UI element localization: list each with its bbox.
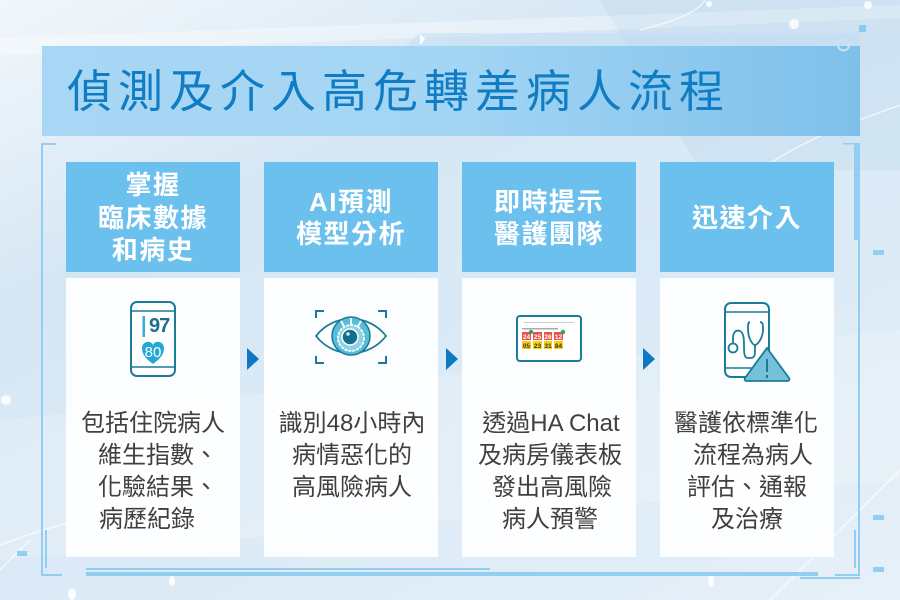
icon: dashboard	[516, 315, 582, 362]
icon: dashboard: 84	[555, 343, 562, 350]
panel: step 1 body	[66, 278, 240, 557]
step 2 description	[279, 410, 425, 501]
step 1 header: 掌握	[125, 170, 180, 200]
step 4 description: 評估、通報	[687, 474, 807, 501]
step 1 description: 維生指數、	[98, 442, 218, 469]
icon: dashboard: 24	[523, 334, 530, 341]
icon: vital signs monitor	[130, 301, 176, 377]
step 1 description: 包括住院病人	[81, 410, 225, 437]
panel: step 3 body	[462, 278, 636, 557]
step 1 header: 和病史	[112, 235, 194, 265]
step 3 description: 透過HA Chat	[482, 410, 620, 437]
step 1 description	[81, 410, 225, 533]
icon: refresh	[837, 46, 850, 52]
step 2 description: 高風險病人	[292, 474, 412, 501]
step 1 description: 病歷紀錄	[99, 506, 195, 533]
step 1 header	[98, 170, 208, 265]
step 4 description: 醫護依標準化	[674, 410, 818, 437]
panel: step 2 body	[264, 278, 438, 557]
step 1 description: 化驗結果、	[98, 474, 218, 501]
step 2 header: 模型分析	[296, 219, 406, 249]
step 2 header: AI預測	[309, 186, 393, 216]
step 3 description: 及病房儀表板	[478, 442, 622, 469]
step 4 description: 及治療	[711, 506, 783, 533]
icon: dashboard: 12	[555, 334, 562, 341]
step 4 description: 流程為病人	[693, 442, 813, 469]
arrow: step 2 to 3	[446, 348, 458, 370]
title text: 偵測及介入高危轉差病人流程	[67, 66, 730, 117]
step 2 header	[296, 186, 406, 249]
step 2 description: 病情惡化的	[292, 442, 412, 469]
icon: vital signs monitor: 97	[149, 315, 170, 337]
step 4 description	[674, 410, 818, 533]
step 2 description: 識別48小時內	[279, 410, 425, 437]
icon: dashboard: 05	[523, 343, 530, 350]
step 3 description	[478, 410, 622, 533]
icon: dashboard: 25	[534, 334, 541, 341]
panel: step 4 body	[660, 278, 834, 557]
icon: eye scan	[314, 310, 388, 364]
icon: dashboard: 23	[534, 343, 541, 350]
step 4 header: 迅速介入	[692, 203, 802, 233]
step 3 header: 醫護團隊	[494, 219, 604, 249]
title banner	[42, 46, 860, 136]
step 1 header: 臨床數據	[98, 203, 208, 233]
step 3 header: 即時提示	[494, 186, 604, 216]
step 3 header	[494, 186, 604, 249]
icon: phone stethoscope warning	[724, 302, 790, 382]
arrow: step 1 to 2	[247, 348, 259, 370]
icon: vital signs monitor: 80	[145, 344, 161, 361]
icon: dashboard: 26	[544, 334, 552, 341]
icon: dashboard: 31	[544, 343, 552, 350]
step 3 description: 病人預警	[502, 506, 598, 533]
step 3 description: 發出高風險	[492, 474, 612, 501]
arrow: step 3 to 4	[643, 348, 655, 370]
